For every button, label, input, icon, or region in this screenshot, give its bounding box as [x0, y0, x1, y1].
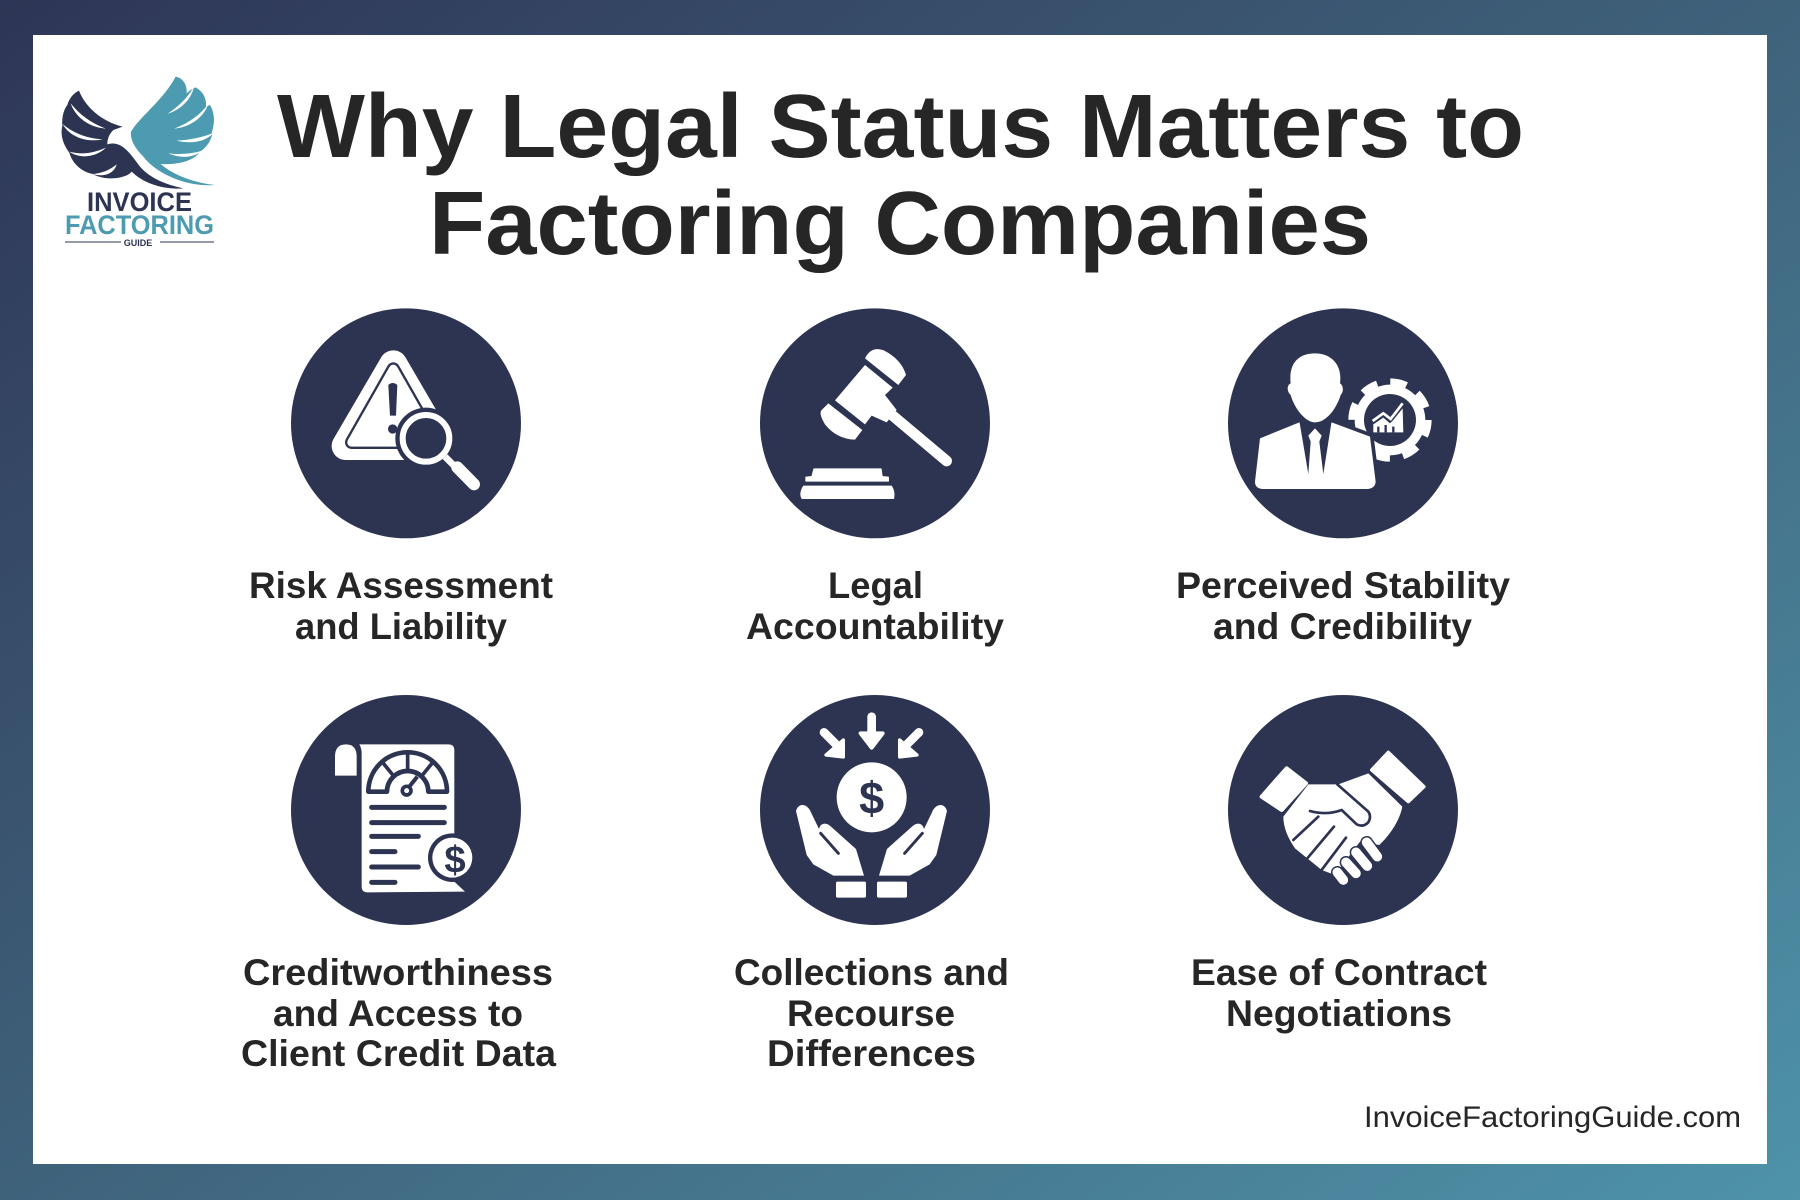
logo wordmark: INVOICE [87, 187, 192, 217]
icon: warning triangle with magnifier [291, 308, 521, 538]
icon: hands receiving coin [760, 695, 990, 925]
label: Legal [828, 565, 923, 606]
label: and Access to [273, 993, 523, 1034]
logo wordmark: FACTORING [65, 210, 214, 240]
label: Perceived Stability [1176, 565, 1510, 606]
label [734, 952, 1009, 1074]
label: and Credibility [1213, 606, 1472, 647]
title: Why Legal Status Matters to [277, 77, 1524, 177]
item: Perceived Stability and Credibility [1176, 308, 1510, 647]
label: Collections and [734, 952, 1009, 993]
label [1191, 952, 1487, 1034]
label: Creditworthiness [243, 952, 553, 993]
title [277, 77, 1524, 274]
label: Ease of Contract [1191, 952, 1487, 993]
item: Risk Assessment and Liability [249, 308, 553, 647]
item: Creditworthiness and Access to Client Credit Data [241, 695, 556, 1074]
icon: handshake [1228, 695, 1458, 925]
icon: eagle wings [62, 77, 215, 189]
logo wordmark [65, 187, 214, 248]
item: Ease of Contract Negotiations [1191, 695, 1487, 1034]
label: Negotiations [1226, 993, 1452, 1034]
icon: businessman and gear [1228, 308, 1458, 538]
logo wordmark: GUIDE [124, 238, 152, 248]
label: Recourse [787, 993, 955, 1034]
title: Factoring Companies [429, 174, 1371, 274]
label: and Liability [295, 606, 507, 647]
label [746, 565, 1004, 647]
icon: hands receiving coin: $ [859, 772, 884, 823]
icon: credit report with gauge [291, 695, 521, 925]
item: Collections and Recourse Differences [734, 695, 1009, 1074]
label [1176, 565, 1510, 647]
item: Legal Accountability [746, 308, 1004, 647]
label: Accountability [746, 606, 1004, 647]
label [241, 952, 556, 1074]
label: Client Credit Data [241, 1033, 556, 1074]
label: Differences [767, 1033, 976, 1074]
icon: credit report with gauge: $ [444, 838, 466, 881]
label [249, 565, 553, 647]
icon: gavel [760, 308, 990, 538]
logo: Invoice Factoring Guide [62, 77, 215, 248]
label: Risk Assessment [249, 565, 553, 606]
website footer: InvoiceFactoringGuide.com [1364, 1101, 1741, 1134]
